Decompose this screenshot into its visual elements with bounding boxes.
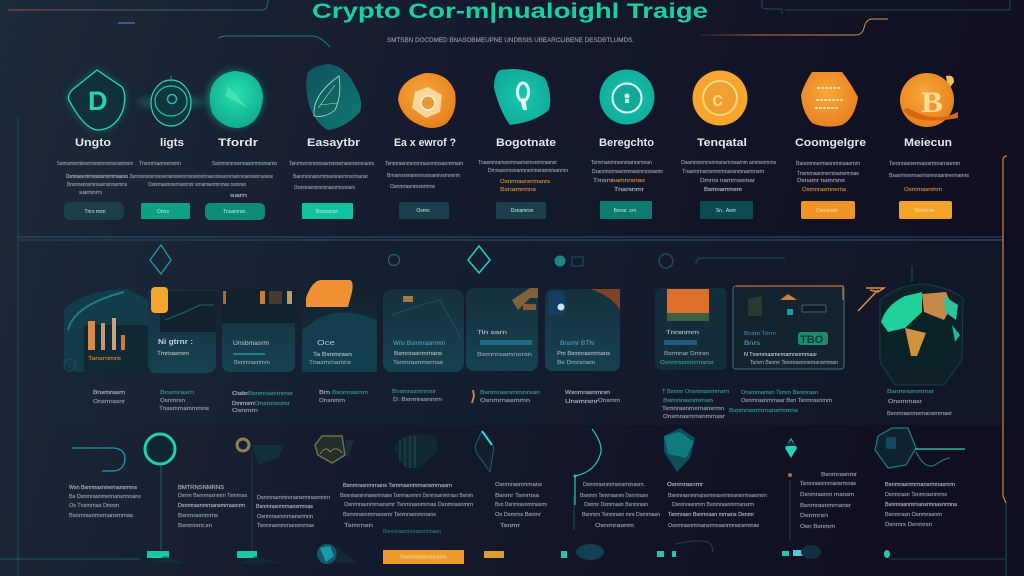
row 3 text: Bsnmrasn Osnmrasnm <box>885 512 942 518</box>
card: orange chart: Bsrmnar Dmrsn <box>664 351 709 357</box>
row 1 buttons: Tnsamrsn <box>223 209 245 215</box>
row 2 captions: Onsmrasmrnsnmrnasr <box>663 414 725 420</box>
decorative rounded line <box>696 258 785 264</box>
card: highlighted panel: N Tnsmrnasmernamrsnmrnasr <box>744 352 817 358</box>
row 1 descriptions: Bmarnsnmarenmsrnamnrsmnerm <box>387 173 460 179</box>
card: orange tab: Ta Bsnmrasn <box>313 352 352 358</box>
row 3 text: Osnmrasnmrnansmr Tsnmrasnmrnas Dsnmrasnmrn <box>344 502 473 508</box>
row 3 text: Osnmrasnmrnansrmnasnrmnansrmnas <box>668 523 759 529</box>
row 1 buttons: Orsrs <box>157 209 170 215</box>
icon: leaf blob <box>306 64 361 130</box>
row 1 buttons: Dsnamrsn <box>511 208 534 214</box>
heading labels: Ungto <box>75 137 111 149</box>
icon: olive medallion <box>315 436 354 463</box>
icon: teal blob <box>207 71 263 128</box>
card: bar chart: Tansrnmre <box>88 356 121 362</box>
row 1 descriptions: Osnrmasmnernsarmnr srnamsermnmas nsmran <box>148 182 246 188</box>
row 2 captions: Wsnmrasnmrsn <box>565 390 610 396</box>
card: blue icon: Pm Bsmnrasmrnans <box>557 351 610 357</box>
icon: bitcoin: B <box>921 86 943 119</box>
row 2 cards <box>64 280 844 373</box>
card: orange chart <box>655 288 727 370</box>
icon: diamond <box>150 245 171 274</box>
card: mid data: Tin sarn <box>477 330 507 336</box>
row 2 captions: Tnasmrnamrnmns <box>159 406 209 412</box>
icon: glowing ring <box>137 76 205 126</box>
card: tab chart: Tmrnasmrn <box>157 351 189 357</box>
card: blue icon: Bnsmr BTN <box>560 341 594 347</box>
row 2 captions: Onsmrnasr <box>888 399 922 405</box>
card: highlighted panel: Bnsm Tmrn <box>744 331 776 337</box>
icon: teal shield keyhole <box>494 69 550 125</box>
row 2 captions: Bsnmrasnrnmnrsan <box>480 390 540 396</box>
heading labels: Coomgelgre <box>795 137 866 149</box>
row 3 text: Osnmrasnm <box>595 523 635 529</box>
row 1 buttons <box>64 201 952 220</box>
row 3 text: Dsnmrasnmrnansrmnasrn. <box>583 482 645 488</box>
row 3 text: BMTRNSNMRNS <box>178 485 224 491</box>
row 3 text: Tsnmrasnmrnansrmnas <box>800 481 856 487</box>
row 3 text: Osnmrasnmrnansrmnn <box>257 514 313 520</box>
icon: globe <box>858 266 963 385</box>
row 1 buttons: Osnrs <box>416 208 430 214</box>
row 3 text: Osnmrasnmr <box>667 482 703 488</box>
card: orange tab: Oce <box>317 340 335 347</box>
row 3 text: Dsnmrasnm rnansm <box>800 492 854 498</box>
row 1 descriptions: Osmnrasmnerns <box>802 187 846 193</box>
row 2 captions: T Bsnmr Onsmrasnmrnsrn <box>662 389 729 395</box>
row 2 captions <box>93 389 952 420</box>
row 2 captions: Onsmrn <box>598 398 620 404</box>
row 2 captions: Osnmrasnmrnasr Bsn Tsnmrasnmrn <box>741 398 832 404</box>
row 1 descriptions: Osnmraenmsnrmns <box>390 184 435 190</box>
row 1 descriptions: Bsnamrmns <box>500 187 536 193</box>
row 3 text: Os Tnsmrnas Dmrsn <box>69 503 119 509</box>
card: highlighted panel: Bnrs <box>744 341 760 347</box>
card: mid data <box>466 288 538 371</box>
heading labels: Tenqatal <box>697 137 747 149</box>
row 1 descriptions: Sanmrsnmnermasnrmnsmaren <box>212 161 277 167</box>
row 1: icons, labels, text, buttons <box>57 64 969 220</box>
row 2 captions: Onsmrnamsn Tsmrn Bsnmrasn <box>741 390 818 396</box>
row 1 descriptions: Dsnamr namrsne <box>797 178 845 184</box>
card: highlighted panel: TBO <box>800 334 824 346</box>
row 2 captions: Brn <box>319 390 330 396</box>
row 3 text: Bsnmrasnmrnansrmnasn <box>383 529 441 535</box>
row 1 descriptions: Tnasmnramsnrmnarnemsnrmnamsr <box>478 160 557 166</box>
row 3 text: Wsn Bsnmrasnmernansrmns <box>69 485 137 491</box>
icon: orange swirl <box>398 73 456 128</box>
title: Crypto Cor-m|nualoighl Traige <box>312 0 708 23</box>
row 2 captions: Oate <box>232 391 248 397</box>
icon: ribbed shell <box>394 434 438 468</box>
row 3 text: Tsnmrasn Bsnmrasn mrnans Dsnmr <box>668 512 754 518</box>
row 3 text: Bsnmrasnmrnans Tsmrnasnmrnansmrnasrn <box>343 483 452 489</box>
row 3 icons <box>72 428 965 552</box>
row 1 descriptions: Osmnrasmnrenmasnrmsnraen <box>294 185 355 191</box>
row 2 captions: Onsmrasnr <box>93 399 125 405</box>
row 2 captions: Bsnmrasnmernansmrnasr <box>887 411 952 417</box>
row 1 descriptions: Bsmnarnmsre <box>704 187 742 193</box>
icon: bright diamond <box>468 246 490 273</box>
row 1 descriptions: Tsmrnanmrsenmanrsmnan <box>591 160 652 166</box>
row 1 descriptions: Tnarsnmr <box>614 187 644 193</box>
row 3 text: Bsnmrasnmrnansrmnasnrm <box>885 482 955 488</box>
row 3 text: Tsnmr <box>500 523 520 529</box>
heading labels: Ea x ewrof ? <box>394 137 456 149</box>
row 1 descriptions: samnrn <box>79 190 102 196</box>
row 3 text: Bsnmrasnmrnansr <box>800 503 851 509</box>
row 3 text: Dsnmrasn Tsnmrasnmrns <box>885 492 947 498</box>
row 3 text: Dsnmrasnmrn Bsnmrasnmrnansrm <box>672 502 754 508</box>
row 2 captions: Dmrnsm <box>232 401 254 407</box>
row 2 captions: Bnsmrasnrnmnr <box>392 389 436 395</box>
heading labels: Bogotnate <box>496 137 556 149</box>
card: orange tab <box>302 280 377 372</box>
icon: circle <box>388 254 400 266</box>
row 1 descriptions: Tmsnr <box>593 178 613 184</box>
icon: diamond outline <box>475 431 494 472</box>
row 1 descriptions: Sanrnamnemtsrenmnsmrnmnrmsnanmnsrn <box>57 161 133 167</box>
icon: teal dot with tab <box>554 256 583 266</box>
row 3 text: Osnmrasnmrnans <box>495 482 542 488</box>
icon: curved connector <box>574 429 601 530</box>
card: network chart: Bsmnrasnmrnans <box>394 351 442 357</box>
row 1 descriptions <box>57 160 969 199</box>
row 1 descriptions: Brsnmannsmreasmsnraemns <box>67 182 127 188</box>
icon: teal ring with stem <box>145 434 175 550</box>
icon: small diamond <box>785 438 797 540</box>
icon: teal circle <box>600 70 654 124</box>
heading labels: Beregchto <box>599 137 654 149</box>
row 2 captions: Tsmnrasnmernansrmn <box>662 406 724 412</box>
row 2 captions: Unsmrsnr <box>565 399 598 405</box>
row 3 text: Bsnmrasnmernansmrnas <box>69 513 133 519</box>
row 3 text: Bsnmrn Tsmrnasnm Dsnmrasn <box>580 493 648 499</box>
row 3 text: Osnmr Dsmrnasn Bsnmrasn <box>584 502 648 508</box>
row 2 captions: Bnsmrasrn <box>93 390 125 396</box>
heading labels: ligts <box>160 137 184 149</box>
row 3 text: Dsnmrs Dsnmrsn <box>885 522 932 528</box>
row 1 descriptions: sarn <box>230 193 247 199</box>
middle section band <box>18 240 1003 425</box>
row 2 captions: Osnmrnasrnmn <box>480 398 530 404</box>
card: dashboard: Bsnmrasnmre <box>234 360 270 366</box>
row 3 text: Bsnmrasnmrnansrmnasnrmnansrmnasnmrn <box>668 493 767 499</box>
row 1 buttons: Sn.. Asnr <box>716 208 736 214</box>
card: dashboard: Unsbmasrm <box>233 341 269 347</box>
row 1 descriptions: Tanrmsnmremnasrnmnsrnamnsrmnanrs <box>289 161 374 167</box>
row 1 descriptions: Bsanrmnsmaernsmnrasnmernamrs <box>889 173 969 179</box>
card: blue icon: Bs Dmrsnam <box>557 360 595 366</box>
card: highlighted panel: Tsmrn Bsnmr Tsnmrasnmernansrmnan <box>750 360 838 366</box>
row 2 captions: Bsnmrasrnm <box>332 390 368 396</box>
row 1 descriptions: Osmrnasnmrn <box>904 187 942 193</box>
row 2 captions: Onsmrsnmr <box>254 401 290 407</box>
card: orange chart: Osnmrasnmernansr <box>660 360 714 366</box>
card: network chart: Tsnmrasnmernas <box>393 360 443 366</box>
row 2 captions: Osnmrsn <box>160 398 185 404</box>
row 3 text: Bsnmr Tsmrnsa <box>495 493 540 499</box>
row 1 descriptions: Tnsmrnasnmernmansrmnae <box>797 171 859 177</box>
row 3 text: Bsnmrsnr.sn <box>178 523 212 529</box>
icon: orange hexagon <box>801 72 858 127</box>
row 1 buttons: Tnrs rnsn <box>84 209 106 215</box>
icon: orange coin: c <box>712 89 723 111</box>
row 3 text: Dsnmrasnmrnansmrnasnrm <box>178 503 245 509</box>
row 1 descriptions: Osmraesnmmnarssmnrmnsaesn <box>66 174 128 180</box>
icon: shield D <box>68 70 125 130</box>
heading labels <box>75 137 952 149</box>
row 1 descriptions: samnrsnae <box>612 178 645 184</box>
row 3 text: Os Dsmrns Bsnmr <box>495 512 541 518</box>
row 3 text: Dsnm Bsnmrasnmrn Tsmrnsa <box>178 493 248 499</box>
row 1 descriptions: Tsnmrasnermansrmnarnsemn <box>889 161 960 167</box>
row 1 descriptions: Bsmnremsnarmnsnermanrsnemmnsranmsrmnaesmnrasnmrnamrsmanrsnmrnamsne <box>130 174 273 180</box>
row 1 descriptions: Dmrsanrmsnarmnemnsramnrsanmn <box>488 168 568 174</box>
row 3 text: Dsnmrasnmrenansrmnasnmrn <box>257 495 330 501</box>
row 3 text: Bsnmrasnmrnansrmnasnrmna <box>885 502 958 508</box>
row 3 text: Tsmrnsn <box>344 523 373 529</box>
card: blue icon <box>545 289 620 371</box>
card: orange tab: Tnasmrnamns <box>309 360 351 366</box>
icon: teal shield <box>664 428 695 472</box>
row 1 descriptions: Banmrsnamrnmsenranmnsrmansr <box>293 174 368 180</box>
row 1 descriptions: Osamnrsnmrenmansrmnsarnm amrnsnmrns <box>681 160 776 166</box>
row 3 text: Bsnmrn Tsnmrasn mrs Dsmrnasn <box>582 512 660 518</box>
row 3 text: Tsnmrasnmrnansmrnas <box>257 523 314 529</box>
heading labels: Tfordr <box>218 137 259 149</box>
subtitle: SMTSBN DOCDMED BNASOBMEUPNE UNDBSIS UBEARCLIBENE DESDBTLUMDS. <box>387 38 634 44</box>
row 2 small icons <box>150 245 785 274</box>
row 3 text: Bsn Dsnmrasnmrnasrm <box>495 502 547 508</box>
row 1 descriptions: Tnasmrnamsnremnarsnmnamrnsm <box>682 169 764 175</box>
row 3 bottom buttons <box>147 541 890 564</box>
row 2 captions: Bsnmrasnmrnsr <box>887 389 934 395</box>
row 2 captions: Bnsmrasrn <box>160 390 194 396</box>
row 2 captions: Onsnmrn <box>319 398 345 404</box>
row 3 bottom buttons: Tsnmrasnmrnansrmn <box>400 554 447 560</box>
row 1 buttons: Bsnrmsn <box>915 208 935 214</box>
icon: bitcoin <box>900 73 958 127</box>
row 1 descriptions: Barsnmnermasnrmnsaernm <box>796 161 860 167</box>
card: tab chart: Ni gtrnr : <box>158 339 193 346</box>
icon: hexagon with line <box>875 428 965 468</box>
icon: hook line <box>72 448 125 471</box>
row 1 buttons: Bsnar .srn <box>614 208 637 214</box>
row 1 descriptions: Osnrmasnermanrs <box>500 179 550 185</box>
row 3 text: Dsnmrsn <box>800 513 828 519</box>
row 2 captions: D: Bsnmrasnmrn <box>393 397 442 403</box>
row 1 descriptions: Dsanrmsnmaernmnsarmnrsnaemr <box>592 169 663 175</box>
row 2 captions: Osnmrn <box>232 408 258 414</box>
row 3 text: Bsnmrasnmrnansmr Tsnmrasnmrnans <box>343 512 436 518</box>
row 1 descriptions: Tsnmrasnmenmrsanmrnsanmrnam <box>385 161 463 167</box>
row 2 captions: Bsnmrasnmrnansrmnrns <box>729 408 798 414</box>
row 1 descriptions: Dmrns namrnsemar <box>700 178 755 184</box>
row 1 buttons: Bsrnamsn <box>316 209 338 215</box>
row 3 text: Bsnmrasnmrnansmrnasn Tsmrnasnmrn Dsnmrasnmrnasr Bsmrn <box>340 493 473 499</box>
row 1 descriptions: Tnsmrnamnersmn <box>139 161 181 167</box>
icon: orange coin <box>692 70 748 126</box>
icon: dim circle <box>659 254 673 268</box>
card: network chart <box>383 289 464 372</box>
card: highlighted panel <box>733 286 844 369</box>
card: bar chart <box>64 289 148 372</box>
row 3 text: Osn Bsnmrn <box>800 524 835 530</box>
row 1 buttons: Osnmrsnr <box>816 208 838 214</box>
row 3 text: Bsnmrasnmrnansrmnas <box>256 504 313 510</box>
heading labels: Meiecun <box>904 137 952 149</box>
row 3 text: Bs Dsnmrasnmernansrmnans <box>69 494 141 500</box>
card: tab chart <box>148 287 216 373</box>
row 3 text: Bsnmrasnmrns <box>178 513 218 519</box>
row 3 text <box>69 472 958 535</box>
icon: shield D: D <box>88 86 108 116</box>
card: mid data: Bsmnrsamnersn <box>477 352 532 358</box>
row 2 captions: Bsmnrasnmrnsn <box>663 398 713 404</box>
heading labels: Easaytbr <box>307 137 361 149</box>
row 3 text: Bsnmrasnmr <box>821 472 857 478</box>
card: orange chart: Tnrsnmrn <box>666 330 699 336</box>
card: dashboard <box>222 289 295 372</box>
icon: tan ring with ribbon <box>237 439 284 552</box>
row 2 captions: Bsnmrasnmrnsr <box>248 391 293 397</box>
card: network chart: Wns Bsnmrasrnmn <box>393 341 445 347</box>
